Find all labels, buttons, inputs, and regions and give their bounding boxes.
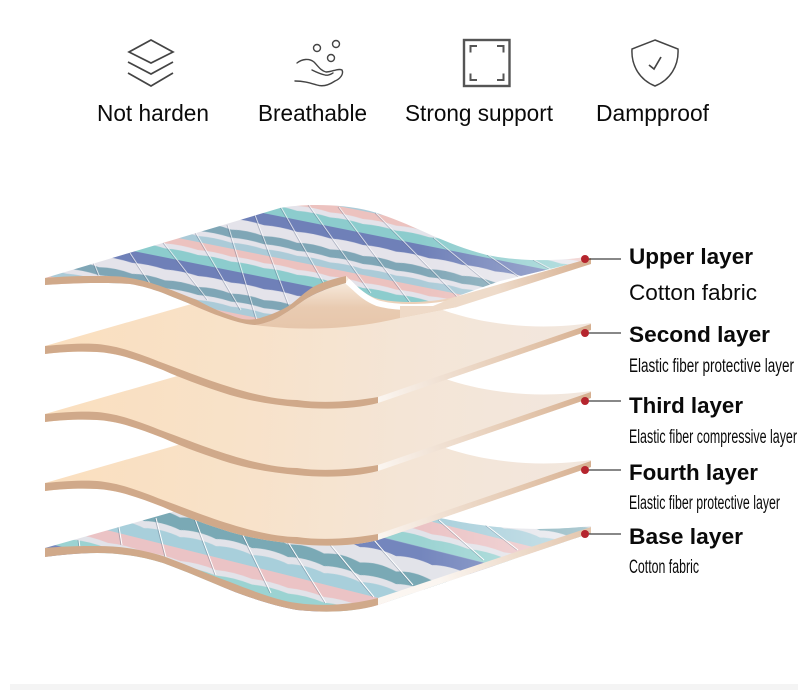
heading: Third layer (629, 393, 743, 418)
callout: upper layer (581, 244, 757, 305)
label: breathable: Breathable (258, 100, 367, 126)
icon: shield with check (632, 40, 678, 86)
marker (581, 397, 621, 405)
marker (581, 530, 621, 538)
label: strong support: Strong support (405, 100, 554, 126)
heading: Fourth layer (629, 460, 758, 485)
feature: breathable (258, 40, 367, 126)
icon: square frame (464, 40, 510, 86)
curled underside (255, 276, 457, 329)
mattress cross-section (40, 200, 600, 620)
marker (581, 329, 621, 337)
third layer (45, 358, 591, 477)
base layer (45, 512, 591, 612)
fourth layer (45, 427, 591, 546)
white edge of the curl (347, 281, 457, 307)
feature: dampproof (596, 40, 710, 126)
label: dampproof: Dampproof (596, 100, 710, 126)
label: not harden: Not harden (97, 100, 209, 126)
right edge band (400, 258, 591, 318)
callout: fourth layer (581, 460, 780, 514)
description: Cotton fabric (629, 280, 757, 305)
marker (581, 466, 621, 474)
description: Cotton fabric (629, 557, 699, 578)
heading: Upper layer (629, 244, 753, 269)
icon: hand with bubbles (295, 40, 343, 86)
heading: Second layer (629, 322, 770, 347)
icon: stacked layers (128, 40, 173, 86)
feature: strong support (405, 40, 554, 126)
base quilted fabric (45, 512, 591, 612)
bottom strip (10, 684, 798, 690)
marker (581, 255, 621, 263)
second layer (45, 290, 591, 409)
front edge band (45, 276, 346, 325)
upper quilted fabric (46, 205, 590, 325)
callout: second layer (581, 322, 794, 377)
upper layer (45, 205, 591, 329)
callout: base layer (581, 524, 743, 578)
callout: third layer (581, 393, 797, 448)
heading: Base layer (629, 524, 743, 549)
feature: not harden (97, 40, 209, 126)
